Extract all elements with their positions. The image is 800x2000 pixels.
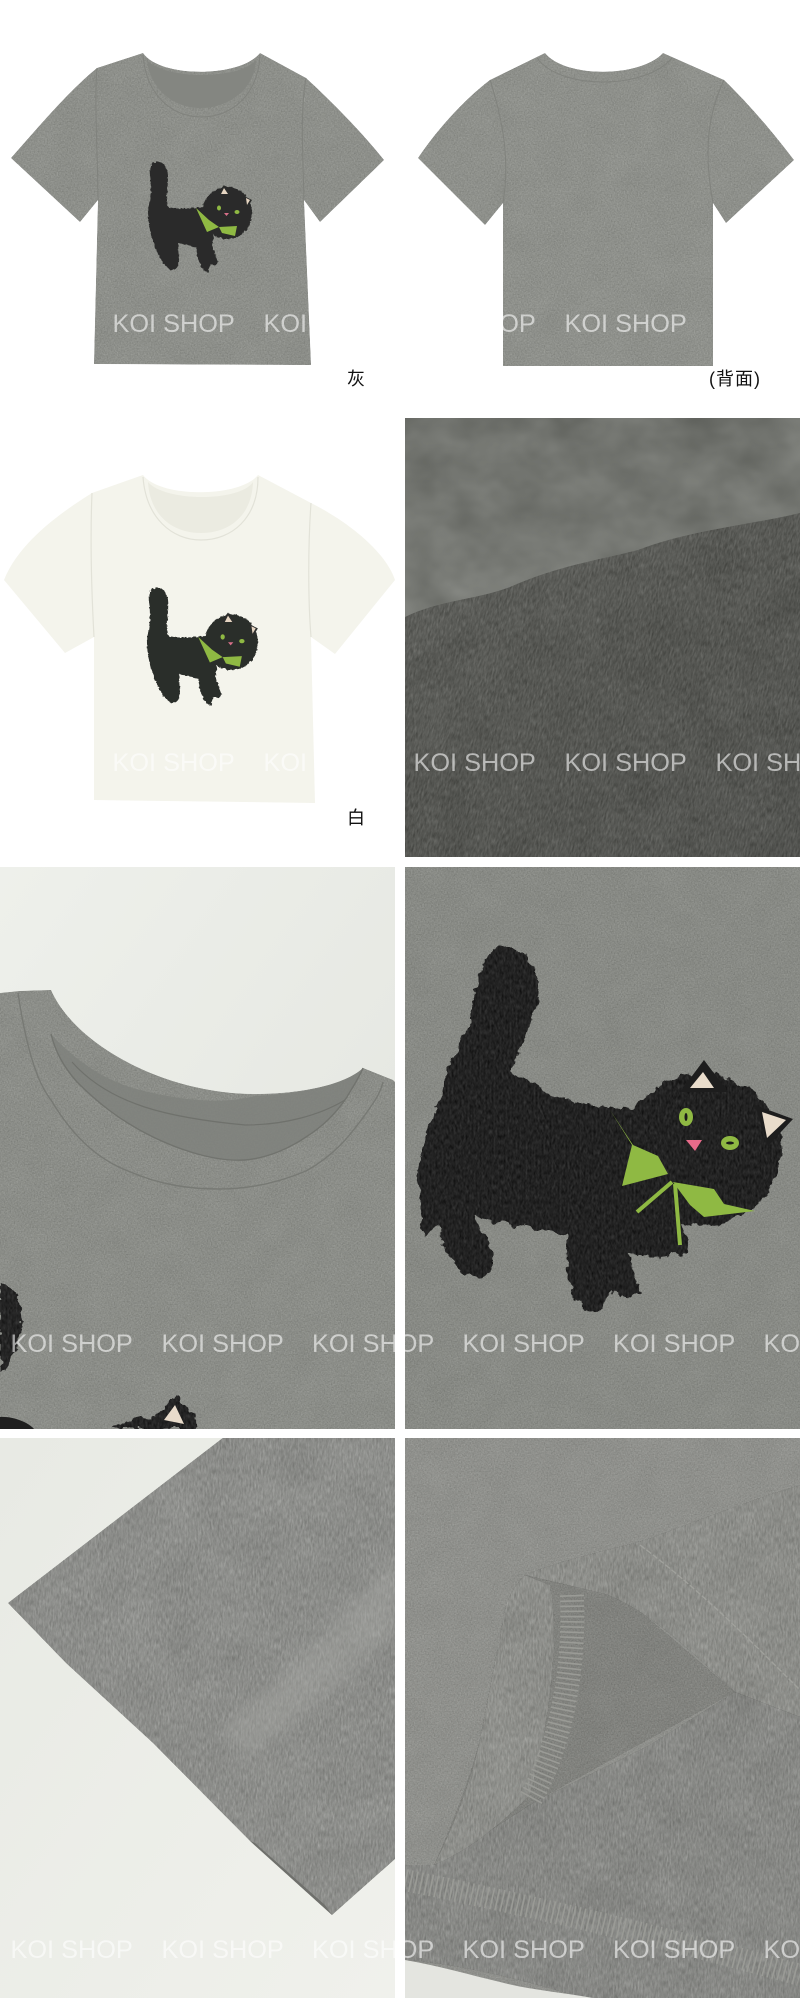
- overlock stitch: [530, 1595, 572, 1800]
- watermark row 1: KOI SHOP: [564, 310, 687, 338]
- white corner: [405, 1960, 593, 1998]
- watermark row 2: KOI SHOP: [264, 749, 386, 777]
- watermark row 2: KOI SHOP: [112, 749, 235, 777]
- lower body: [405, 1692, 800, 2000]
- watermark row 3: KOI SHOP: [613, 1330, 735, 1358]
- watermark row 1: [112, 310, 800, 338]
- fabric: [405, 867, 800, 1429]
- cat ear: [164, 1405, 184, 1424]
- collar and seams: [490, 58, 724, 203]
- ribbed band: [434, 1575, 554, 1865]
- watermark row 2: KOI SHOP: [414, 749, 536, 777]
- watermark row 4: KOI SHOP: [462, 1936, 585, 1964]
- backdrop: [0, 867, 395, 1094]
- watermark row 3: [10, 1330, 800, 1358]
- inner cuff: [250, 1841, 332, 1915]
- watermark row 3: KOI SHOP: [462, 1330, 585, 1358]
- watermark row 4: KOI SHOP: [312, 1936, 434, 1964]
- panel: hem close-up: [405, 1438, 800, 2000]
- panel: cat print close-up: [405, 867, 800, 1429]
- watermark row 4: KOI SHOP: [162, 1936, 284, 1964]
- folded fabric: [405, 513, 800, 857]
- bottom overlock stitch: [405, 1880, 800, 1975]
- shirt body: [11, 53, 384, 365]
- partial cat head: [112, 1396, 198, 1429]
- watermark row 1: KOI SHOP: [112, 310, 235, 338]
- shirt body: [418, 53, 794, 366]
- upper flap: [525, 1485, 800, 1717]
- sleeve: [8, 1437, 395, 1915]
- panel: grey tee back: [418, 53, 794, 366]
- watermark row 1: KOI SHOP: [414, 310, 536, 338]
- panel: grey tee front: [11, 53, 384, 365]
- watermark row 2: [112, 749, 800, 777]
- panel: fabric close-up: [405, 418, 800, 857]
- collar band edge: [18, 993, 383, 1189]
- watermark row 3: KOI SHOP: [10, 1330, 133, 1358]
- sleeve highlight: [230, 1578, 392, 1754]
- watermark row 1: KOI SHOP: [264, 310, 386, 338]
- collar and seams: [96, 55, 306, 200]
- panel: collar close-up: [0, 867, 395, 1429]
- watermark row 4: [10, 1936, 800, 1964]
- shirt body: [4, 475, 395, 803]
- cat print: [418, 947, 793, 1315]
- label: white: 白: [347, 808, 365, 828]
- watermark row 3: KOI SHOP: [312, 1330, 434, 1358]
- inside of sleeve: [434, 1575, 735, 1865]
- collar and seams: [91, 477, 311, 637]
- cat print: [147, 588, 258, 705]
- background fabric: [405, 1438, 800, 1998]
- collar stitching: [72, 1062, 345, 1125]
- backdrop: [0, 1438, 395, 1998]
- label: back side: (背面): [709, 369, 761, 389]
- inner back neck: [148, 482, 253, 533]
- watermark row 2: KOI SHOP: [564, 749, 687, 777]
- watermark row 4: KOI SHOP: [613, 1936, 735, 1964]
- watermark row 4: KOI SHOP: [10, 1936, 133, 1964]
- watermark row 3: KOI SHOP: [162, 1330, 284, 1358]
- partial cat body: [0, 1417, 34, 1429]
- panel: white tee front: [4, 475, 395, 803]
- partial cat tail: [0, 1282, 22, 1372]
- inner back neck: [51, 1034, 363, 1160]
- cat print: [148, 162, 252, 272]
- blurred background fabric: [405, 418, 800, 617]
- panel: sleeve close-up: [0, 1437, 395, 1998]
- flap stitching: [640, 1545, 800, 1690]
- label: grey: 灰: [347, 369, 365, 389]
- inner back neck: [147, 60, 256, 108]
- collar inner edge: [51, 1034, 363, 1160]
- shirt: [0, 990, 395, 1429]
